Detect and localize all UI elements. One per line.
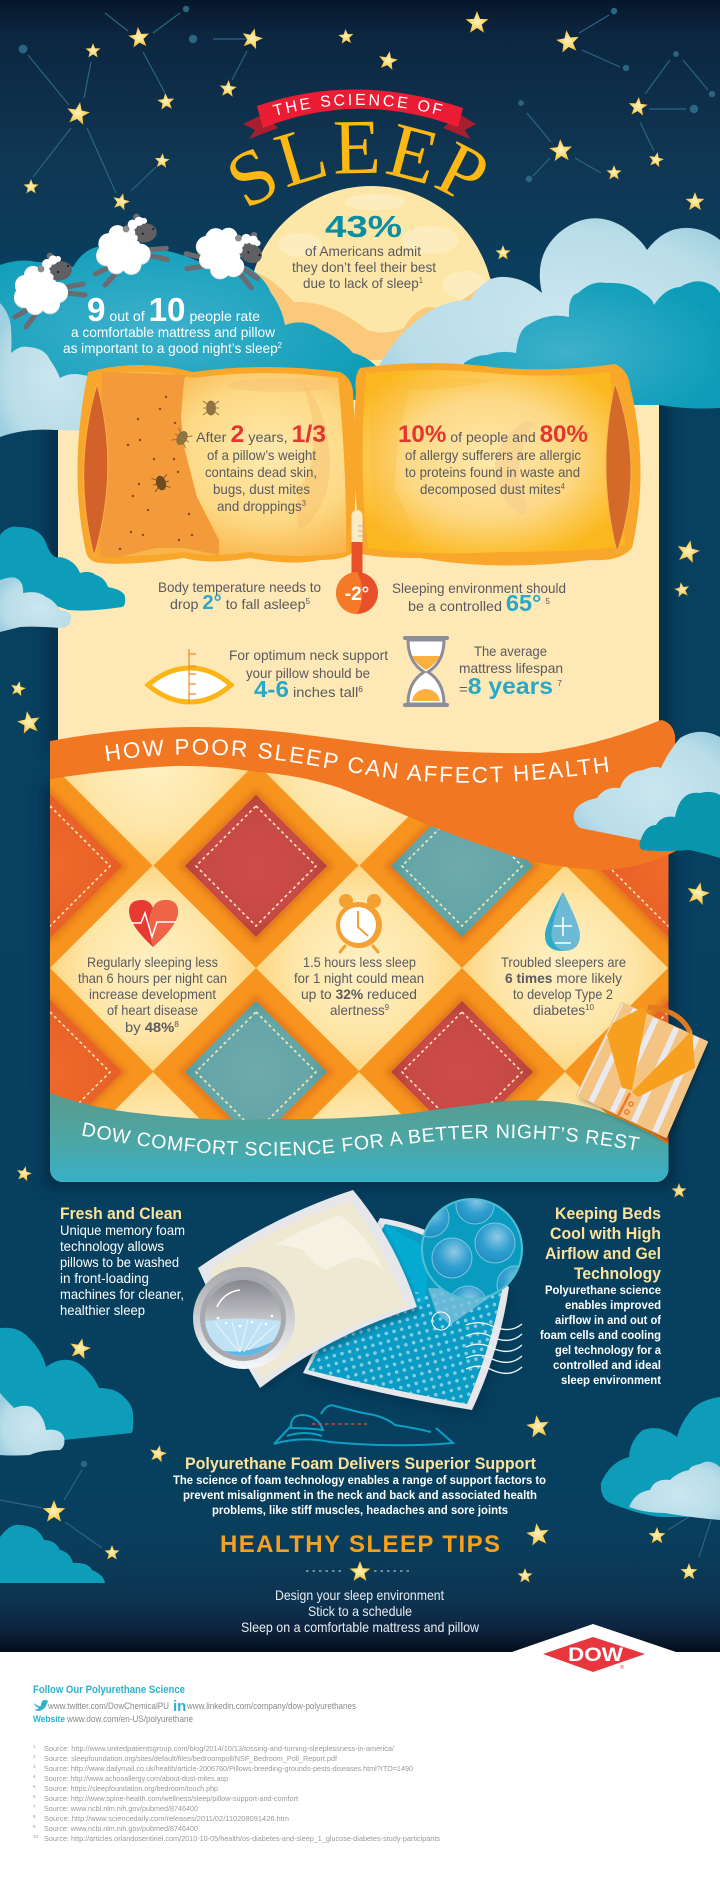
- teal band: DOW COMFORT SCIENCE FOR A BETTER NIGHT’S REST: [82, 1122, 640, 1156]
- orange banner: HOW POOR SLEEP CAN AFFECT HEALTH: [105, 738, 608, 783]
- text: heart disease: Regularly sleeping less: [87, 954, 218, 970]
- text: polyurethane foam support: Polyurethane Foam Delivers Superior Support: [185, 1454, 536, 1473]
- cream panel: [46, 390, 671, 765]
- stat: 43%: 43%: [325, 209, 402, 244]
- right pillow text: to proteins found in waste and: [405, 464, 580, 480]
- text: diabetes: 10: [585, 1003, 595, 1012]
- text: alertness: [294, 954, 424, 1018]
- dust mite specks: [119, 396, 193, 550]
- moon: [248, 186, 500, 432]
- text: tips list: Sleep on a comfortable mattress and pillow: [241, 1619, 480, 1635]
- footer: sources: Source: http://www.sciencedaily.com/releases/2011/02/110208091426.htm: [44, 1814, 289, 1823]
- footer: sources: 6: [33, 1794, 36, 1799]
- text: heart disease: increase development: [89, 986, 216, 1002]
- footer: sources: 7: [33, 1804, 36, 1809]
- teal band: [50, 1093, 668, 1182]
- title SLEEP: [230, 122, 486, 206]
- right pillow: [354, 363, 641, 566]
- stat: 9 out of 10: [63, 291, 283, 356]
- text: keeping beds cool: gel technology for a: [555, 1345, 662, 1357]
- pajama shirt: [577, 1003, 709, 1141]
- text: keeping beds cool: Cool with High: [550, 1224, 661, 1243]
- text: alertness: up to 32% reduced: [301, 986, 417, 1002]
- text: polyurethane foam support: prevent misalignment in the neck and back and associated health: [183, 1490, 537, 1502]
- text: neck support: your pillow should be: [246, 665, 370, 681]
- left pillow text: 3: [302, 499, 307, 508]
- left pillow text: of a pillow’s weight: [207, 447, 316, 463]
- footer: follow links: www.twitter.com/DowChemicalPU: [47, 1701, 169, 1712]
- text: polyurethane foam support: [173, 1454, 546, 1517]
- footer: follow links: www.dow.com/en-US/polyurethane: [66, 1714, 193, 1725]
- text: fresh and clean: Fresh and Clean: [60, 1204, 182, 1223]
- clock icon: [336, 894, 382, 952]
- text: sleeping environment: be a controlled 65°: [408, 590, 541, 616]
- heading: healthy sleep tips: HEALTHY SLEEP TIPS: [220, 1531, 500, 1558]
- footer: sources: Source: http://articles.orlandosentinel.com/2010-10-05/health/os-diabetes-and-sleep_1_glucose-diabetes-study-participants: [44, 1834, 440, 1843]
- stat: 43%: due to lack of sleep: [303, 275, 424, 291]
- footer: sources: [33, 1744, 440, 1843]
- footer: sources: Source: sleepfoundation.org/sites/default/files/bedroompoll/NSF_Bedroom_Poll_Report.pdf: [44, 1754, 338, 1763]
- text: tips list: [241, 1587, 480, 1635]
- panel shadow lower: [42, 780, 677, 1190]
- text: fresh and clean: [60, 1204, 185, 1318]
- cloud: bottom left: [0, 1525, 105, 1583]
- text: fresh and clean: Unique memory foam: [60, 1222, 185, 1238]
- icon: thermometer: -2°: [345, 584, 369, 605]
- stat: 9 out of 10: a comfortable mattress and pillow: [71, 324, 276, 340]
- left pillow: [77, 365, 355, 564]
- footer: follow links: www.linkedin.com/company/dow-polyurethanes: [186, 1701, 356, 1712]
- text: diabetes: 6 times more likely: [505, 970, 622, 986]
- text: diabetes: to develop Type 2: [513, 986, 613, 1002]
- magnified gel bubble: [421, 1198, 523, 1300]
- text: body temperature: [158, 579, 321, 614]
- stat: 43%: they don’t feel their best: [292, 259, 436, 275]
- stat: 43%: [292, 209, 436, 291]
- text: fresh and clean: machines for cleaner,: [60, 1286, 184, 1302]
- text: keeping beds cool: foam cells and cooling: [540, 1330, 661, 1342]
- text: mattress lifespan: 7: [557, 679, 563, 688]
- text: heart disease: than 6 hours per night can: [78, 970, 227, 986]
- front pillow: [198, 1190, 419, 1393]
- footer: sources: Source: http://www.achooallergy.com/about-dust-mites.asp: [44, 1774, 228, 1783]
- cloud: upper right pale: [376, 218, 720, 400]
- text: keeping beds cool: Technology: [574, 1264, 661, 1283]
- title SLEEP: SLEEP: [230, 122, 486, 206]
- text: neck support: For optimum neck support: [229, 647, 388, 663]
- drop icon: [545, 892, 580, 951]
- icon: hourglass: [403, 636, 449, 707]
- text: fresh and clean: pillows to be washed: [60, 1254, 179, 1270]
- cloud: upper left pale: [0, 303, 100, 437]
- stat: 9 out of 10: as important to a good night’s sleep: [63, 340, 284, 356]
- text: polyurethane foam support: The science of foam technology enables a range of support factors to: [173, 1475, 546, 1487]
- cloud: mid left: [0, 527, 125, 632]
- text: keeping beds cool: [540, 1204, 662, 1387]
- footer: sources: 10: [33, 1834, 39, 1839]
- footer: sources: 3: [33, 1764, 36, 1769]
- text: heart disease: of heart disease: [107, 1002, 198, 1018]
- cloud: upper left teal: [0, 243, 376, 400]
- left pillow text: [196, 421, 326, 514]
- left pillow text: bugs, dust mites: [213, 481, 310, 497]
- diamond cells: [50, 794, 668, 1143]
- heart icon: [129, 900, 178, 947]
- text: alertness: 1.5 hours less sleep: [303, 954, 416, 970]
- dow logo: DOW: [568, 1645, 623, 1666]
- text: mattress lifespan: The average: [474, 643, 547, 659]
- stat: 43%: of Americans admit: [305, 243, 421, 259]
- text: neck support: 4-6 inches tall: [254, 676, 355, 702]
- text: keeping beds cool: airflow in and out of: [555, 1315, 661, 1327]
- text: sleeping environment: Sleeping environment should: [392, 580, 566, 596]
- footer: sources: Source: http://www.unitedpatientsgroup.com/blog/2014/10/13/tossing-and-turning-sleeplessness-in-america/: [44, 1744, 395, 1753]
- text: heart disease: 8: [174, 1020, 180, 1029]
- footer: follow links: in: [173, 1698, 186, 1715]
- text: heart disease: by 48%: [125, 1019, 173, 1035]
- stat: 43%: 1: [419, 276, 424, 285]
- dow logo: [509, 1624, 679, 1672]
- text: keeping beds cool: Airflow and Gel: [545, 1244, 661, 1263]
- icon: thermometer: [336, 510, 378, 614]
- text: diabetes: Troubled sleepers are: [501, 954, 626, 970]
- footer: follow links: Follow Our Polyurethane Science: [33, 1684, 185, 1696]
- footer: follow links: Website: [33, 1714, 65, 1725]
- text: mattress lifespan: [459, 643, 563, 699]
- text: alertness: for 1 night could mean: [294, 970, 424, 986]
- text: keeping beds cool: controlled and ideal: [553, 1360, 661, 1372]
- stat: 9 out of 10: 9 out of 10 people rate: [87, 291, 260, 328]
- footer white area: [0, 1652, 720, 1886]
- icon: bugs: [151, 401, 219, 492]
- footer: sources: 9: [33, 1824, 36, 1829]
- sheep: [14, 207, 281, 327]
- text: diabetes: diabetes: [533, 1002, 586, 1018]
- left pillow text: contains dead skin,: [205, 464, 317, 480]
- text: diabetes: [501, 954, 626, 1018]
- text: keeping beds cool: sleep environment: [561, 1375, 661, 1387]
- text: body temperature: Body temperature needs to: [158, 579, 321, 595]
- footer: sources: 2: [33, 1754, 36, 1759]
- text: fresh and clean: in front-loading: [60, 1270, 149, 1286]
- orange banner: [50, 720, 677, 870]
- left pillow text: and droppings: [217, 498, 306, 514]
- footer: sources: 4: [33, 1774, 36, 1779]
- panel: argyle health section: [50, 766, 668, 1182]
- text: keeping beds cool: enables improved: [565, 1300, 661, 1312]
- footer: sources: 1: [33, 1744, 36, 1749]
- text: alertness: alertness: [330, 1002, 387, 1018]
- cloud: lower left: [0, 1328, 133, 1456]
- band shading: [50, 788, 668, 1145]
- text: mattress lifespan: mattress lifespan: [459, 660, 563, 676]
- footer: sources: Source: http://www.spine-health.com/wellness/sleep/pillow-support-and-comfort: [44, 1794, 299, 1803]
- text: tips list: Stick to a schedule: [308, 1603, 412, 1619]
- dow logo: ®: [620, 1664, 624, 1671]
- text: body temperature: drop 2° to fall asleep: [170, 592, 304, 614]
- right pillow text: 4: [561, 482, 566, 491]
- right pillow text: decomposed dust mites: [420, 481, 568, 497]
- left pillow text: After 2 years, 1/3: [196, 421, 326, 448]
- stitching: [50, 805, 668, 1120]
- footer: sources: Source: http://www.dailymail.co.uk/health/article-2006760/Pillows-breeding-grounds-pests-diseases.html?ITO=1490: [44, 1764, 413, 1773]
- footer: sources: 5: [33, 1784, 36, 1789]
- footer: sources: Source: www.ncbi.nlm.nih.gov/pubmed/8746400: [44, 1824, 198, 1833]
- right pillow text: [398, 421, 588, 497]
- airflow lines: [466, 1323, 522, 1373]
- icon: sleeping person: [274, 1405, 453, 1445]
- right pillow text: of allergy sufferers are allergic: [405, 447, 581, 463]
- text: neck support: 6: [358, 685, 364, 694]
- cloud: lower right: [601, 1397, 720, 1520]
- footer: follow links: [33, 1684, 356, 1725]
- text: keeping beds cool: Polyurethane science: [545, 1285, 661, 1297]
- back foam pillow: [300, 1218, 512, 1417]
- text: keeping beds cool: Keeping Beds: [555, 1204, 661, 1223]
- footer: sources: Source: www.ncbi.nlm.nih.gov/pubmed/8746400: [44, 1804, 198, 1813]
- cloud: upper right teal: [464, 281, 720, 409]
- text: neck support: [229, 647, 388, 702]
- text: heart disease: [78, 954, 227, 1035]
- footer: sources: Source: https://sleepfoundation.org/bedroom/touch.php: [44, 1784, 218, 1793]
- text: fresh and clean: technology allows: [60, 1238, 164, 1254]
- ribbon title: THE SCIENCE OF: [272, 94, 443, 116]
- text: body temperature: 5: [305, 597, 311, 606]
- ribbon title: [243, 90, 476, 139]
- text: alertness: 9: [385, 1003, 390, 1012]
- footer: sources: 8: [33, 1814, 36, 1819]
- stat: 9 out of 10: 2: [278, 341, 283, 350]
- text: polyurethane foam support: problems, like stiff muscles, headaches and sore joints: [212, 1505, 508, 1517]
- cloud: mid right: [574, 732, 720, 858]
- cream diamonds: [50, 766, 668, 1182]
- right pillow text: 10% of people and 80%: [398, 421, 588, 448]
- star divider: [306, 1561, 412, 1581]
- text: mattress lifespan: =8 years: [459, 673, 547, 699]
- text: sleeping environment: [392, 580, 566, 616]
- text: sleeping environment: 5: [545, 597, 551, 606]
- text: tips list: Design your sleep environment: [275, 1587, 444, 1603]
- text: fresh and clean: healthier sleep: [60, 1302, 145, 1318]
- icon: neck pillow: [148, 649, 231, 704]
- washing machine door: [193, 1267, 295, 1369]
